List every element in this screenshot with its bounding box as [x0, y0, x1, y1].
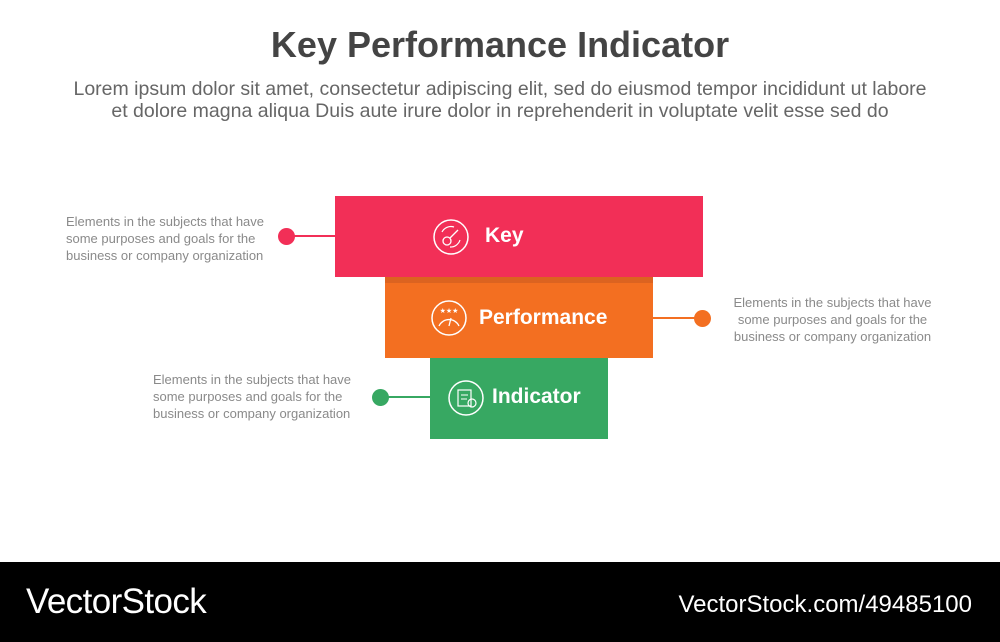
text: performance description: business or company organization: [734, 329, 931, 344]
text: indicator description: Elements in the subjects that have: [153, 372, 351, 387]
title: Key Performance Indicator: [271, 24, 729, 65]
connector: performance: [653, 310, 711, 327]
text: key description: Elements in the subjects that have: [66, 214, 264, 229]
text: performance description: Elements in the subjects that have: [733, 295, 932, 310]
footer band: [0, 562, 1000, 642]
subtitle: Lorem ipsum dolor sit amet, consectetur adipiscing elit, sed do eiusmod tempor incididunt ut labore: [73, 78, 927, 100]
icon: gauge: [431, 300, 467, 336]
text: performance description: [733, 295, 932, 344]
text: key description: [66, 214, 264, 263]
text: indicator description: business or company organization: [153, 406, 350, 421]
text: indicator description: [153, 372, 351, 421]
icon: gauge: ★★★: [440, 307, 458, 315]
label: Indicator: Indicator: [492, 385, 581, 408]
subtitle: [73, 78, 927, 122]
icon: key: [433, 219, 469, 255]
text: performance description: some purposes and goals for the: [738, 312, 927, 327]
connector: indicator: [372, 389, 430, 406]
panel: indicator: [430, 358, 608, 439]
footer logo: VectorStock: [26, 582, 206, 621]
text: indicator description: some purposes and goals for the: [153, 389, 342, 404]
label: Key: Key: [485, 224, 524, 247]
connector: key: [278, 228, 335, 245]
panel: performance: [385, 277, 653, 358]
subtitle: et dolore magna aliqua Duis aute irure dolor in reprehenderit in voluptate velit esse sed do: [111, 100, 889, 122]
text: key description: some purposes and goals for the: [66, 231, 255, 246]
label: Performance: Performance: [479, 306, 607, 329]
text: key description: business or company organization: [66, 248, 263, 263]
icon: clipboard target: [448, 380, 484, 416]
footer url: VectorStock.com/49485100: [678, 591, 972, 618]
panel: key: [335, 196, 703, 277]
